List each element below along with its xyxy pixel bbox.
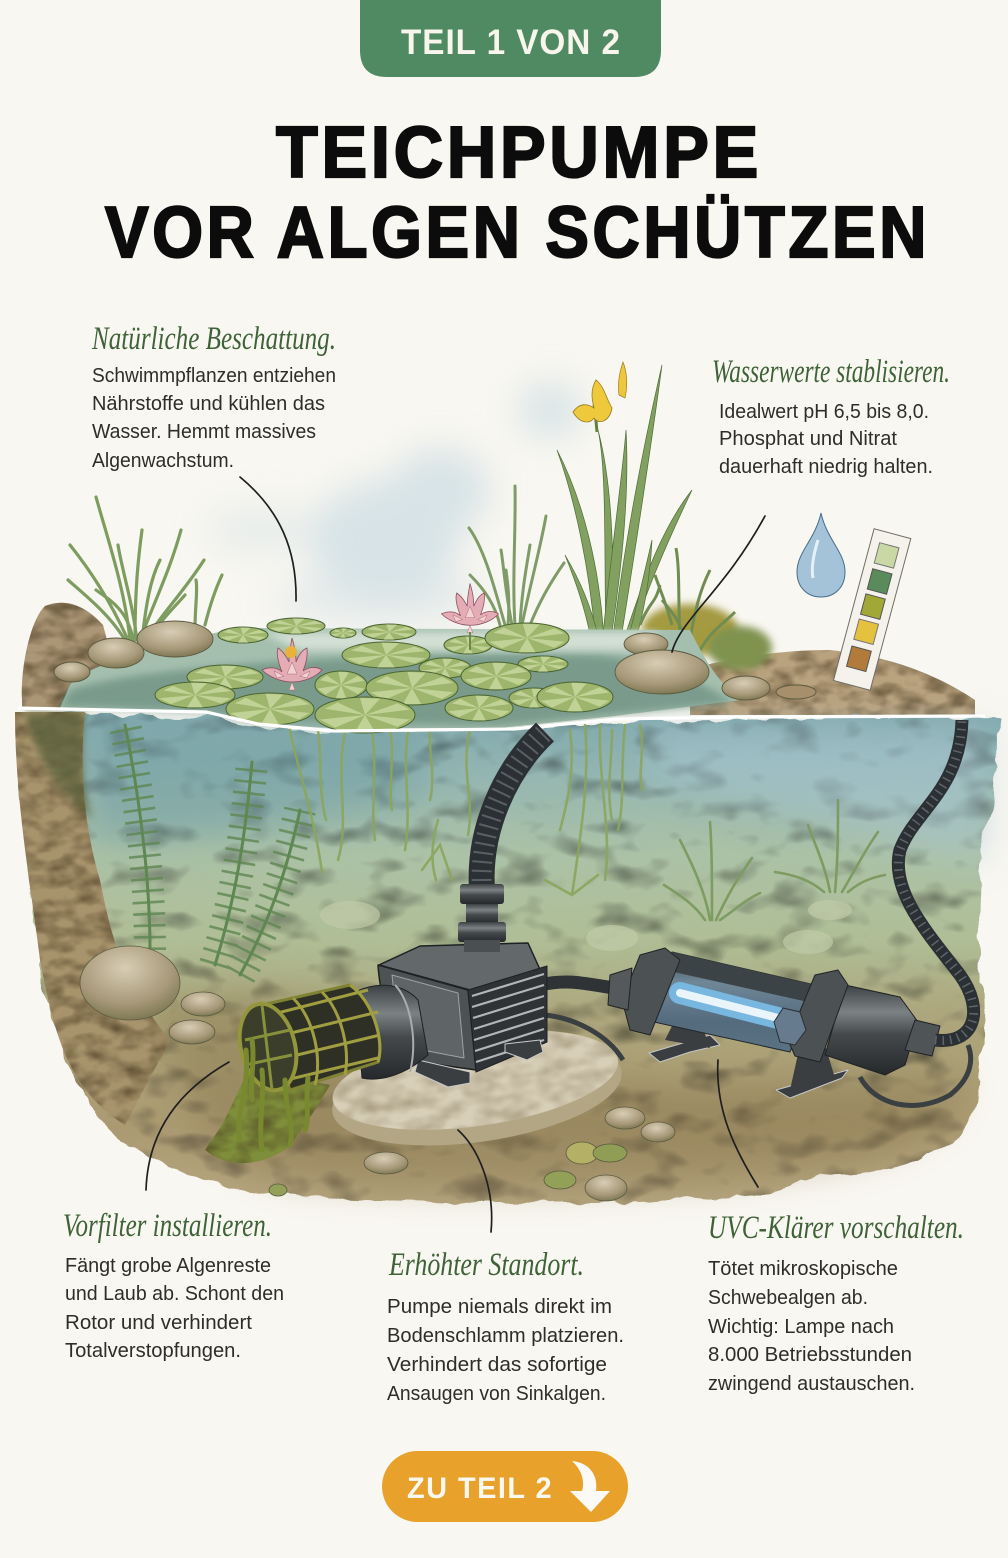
text: water values: Phosphat und Nitrat [719,428,897,450]
text: natural shading: Wasser. Hemmt massives [92,421,316,443]
text: natural shading: Nährstoffe und kühlen das [92,393,325,415]
button: to part 2 [382,1451,628,1522]
text: natural shading [91,321,336,472]
stone plinth [324,1014,629,1162]
power cable and pump-to-uvc pipe [540,982,971,1105]
discharge hose [482,732,545,890]
text: raised position: Verhindert das sofortige [387,1354,607,1376]
icon: curved arrow down [570,1461,610,1512]
text: prefilter: Totalverstopfungen. [65,1340,241,1362]
text: prefilter [63,1208,284,1362]
lily pads [155,618,613,733]
text: UVC clarifier: Tötet mikroskopische [708,1258,898,1280]
badge: part 1 of 2: TEIL 1 VON 2 [401,23,621,62]
text: prefilter: Fängt grobe Algenreste [65,1255,271,1277]
text: natural shading: Schwimmpflanzen entziehen [92,365,336,387]
right shore and bushes [640,548,975,715]
text: raised position: Bodenschlamm platzieren. [387,1325,624,1347]
text: UVC clarifier: Schwebealgen ab. [708,1287,868,1309]
left bank underwater [15,712,170,1125]
text: raised position: Ansaugen von Sinkalgen. [387,1383,606,1405]
text: water values [712,354,950,478]
callout leaders [146,477,765,1232]
pump body [355,884,547,1087]
title: VOR ALGEN SCHÜTZEN [105,193,930,273]
text: prefilter: und Laub ab. Schont den [65,1283,284,1305]
text: prefilter: Rotor und verhindert [65,1312,252,1334]
iris plant [557,362,692,645]
title: TEICHPUMPE [276,113,762,193]
text: water values: Idealwert pH 6,5 bis 8,0. [719,401,929,423]
pH test strip [833,529,911,690]
outlet hose [898,720,974,1040]
text: UVC clarifier: Wichtig: Lampe nach [708,1316,894,1338]
text: prefilter: Vorfilter installieren. [63,1208,272,1244]
reeds middle [469,486,564,625]
pond floor shading [150,997,960,1189]
text: natural shading: Natürliche Beschattung. [91,321,336,357]
prefilter cage [231,985,380,1150]
UVC clarifier [608,948,940,1098]
underwater section [15,712,998,1203]
water drop icon [797,513,845,597]
left bank [22,603,114,708]
shore rocks [54,621,816,700]
boulders and pebbles [80,900,852,1201]
algae on filter [205,1070,330,1163]
button: to part 2: ZU TEIL 2 [407,1472,553,1505]
text: natural shading: Algenwachstum. [92,450,234,472]
title [105,113,930,273]
text: UVC clarifier: zwingend austauschen. [708,1373,915,1395]
text: raised position: Erhöhter Standort. [388,1247,584,1283]
text: UVC clarifier [708,1210,964,1395]
left shore grasses [68,497,222,640]
water lilies [262,584,498,690]
text: UVC clarifier: 8.000 Betriebsstunden [708,1344,912,1366]
waterline highlight [18,708,985,731]
text: raised position: Pumpe niemals direkt im [387,1296,612,1318]
underwater plants [125,725,885,975]
text: raised position [387,1247,624,1405]
text: water values: dauerhaft niedrig halten. [719,456,933,478]
watercolor sky wash [205,382,582,625]
badge: part 1 of 2 [360,0,661,77]
pond surface [60,628,740,728]
pond illustration [15,362,998,1232]
